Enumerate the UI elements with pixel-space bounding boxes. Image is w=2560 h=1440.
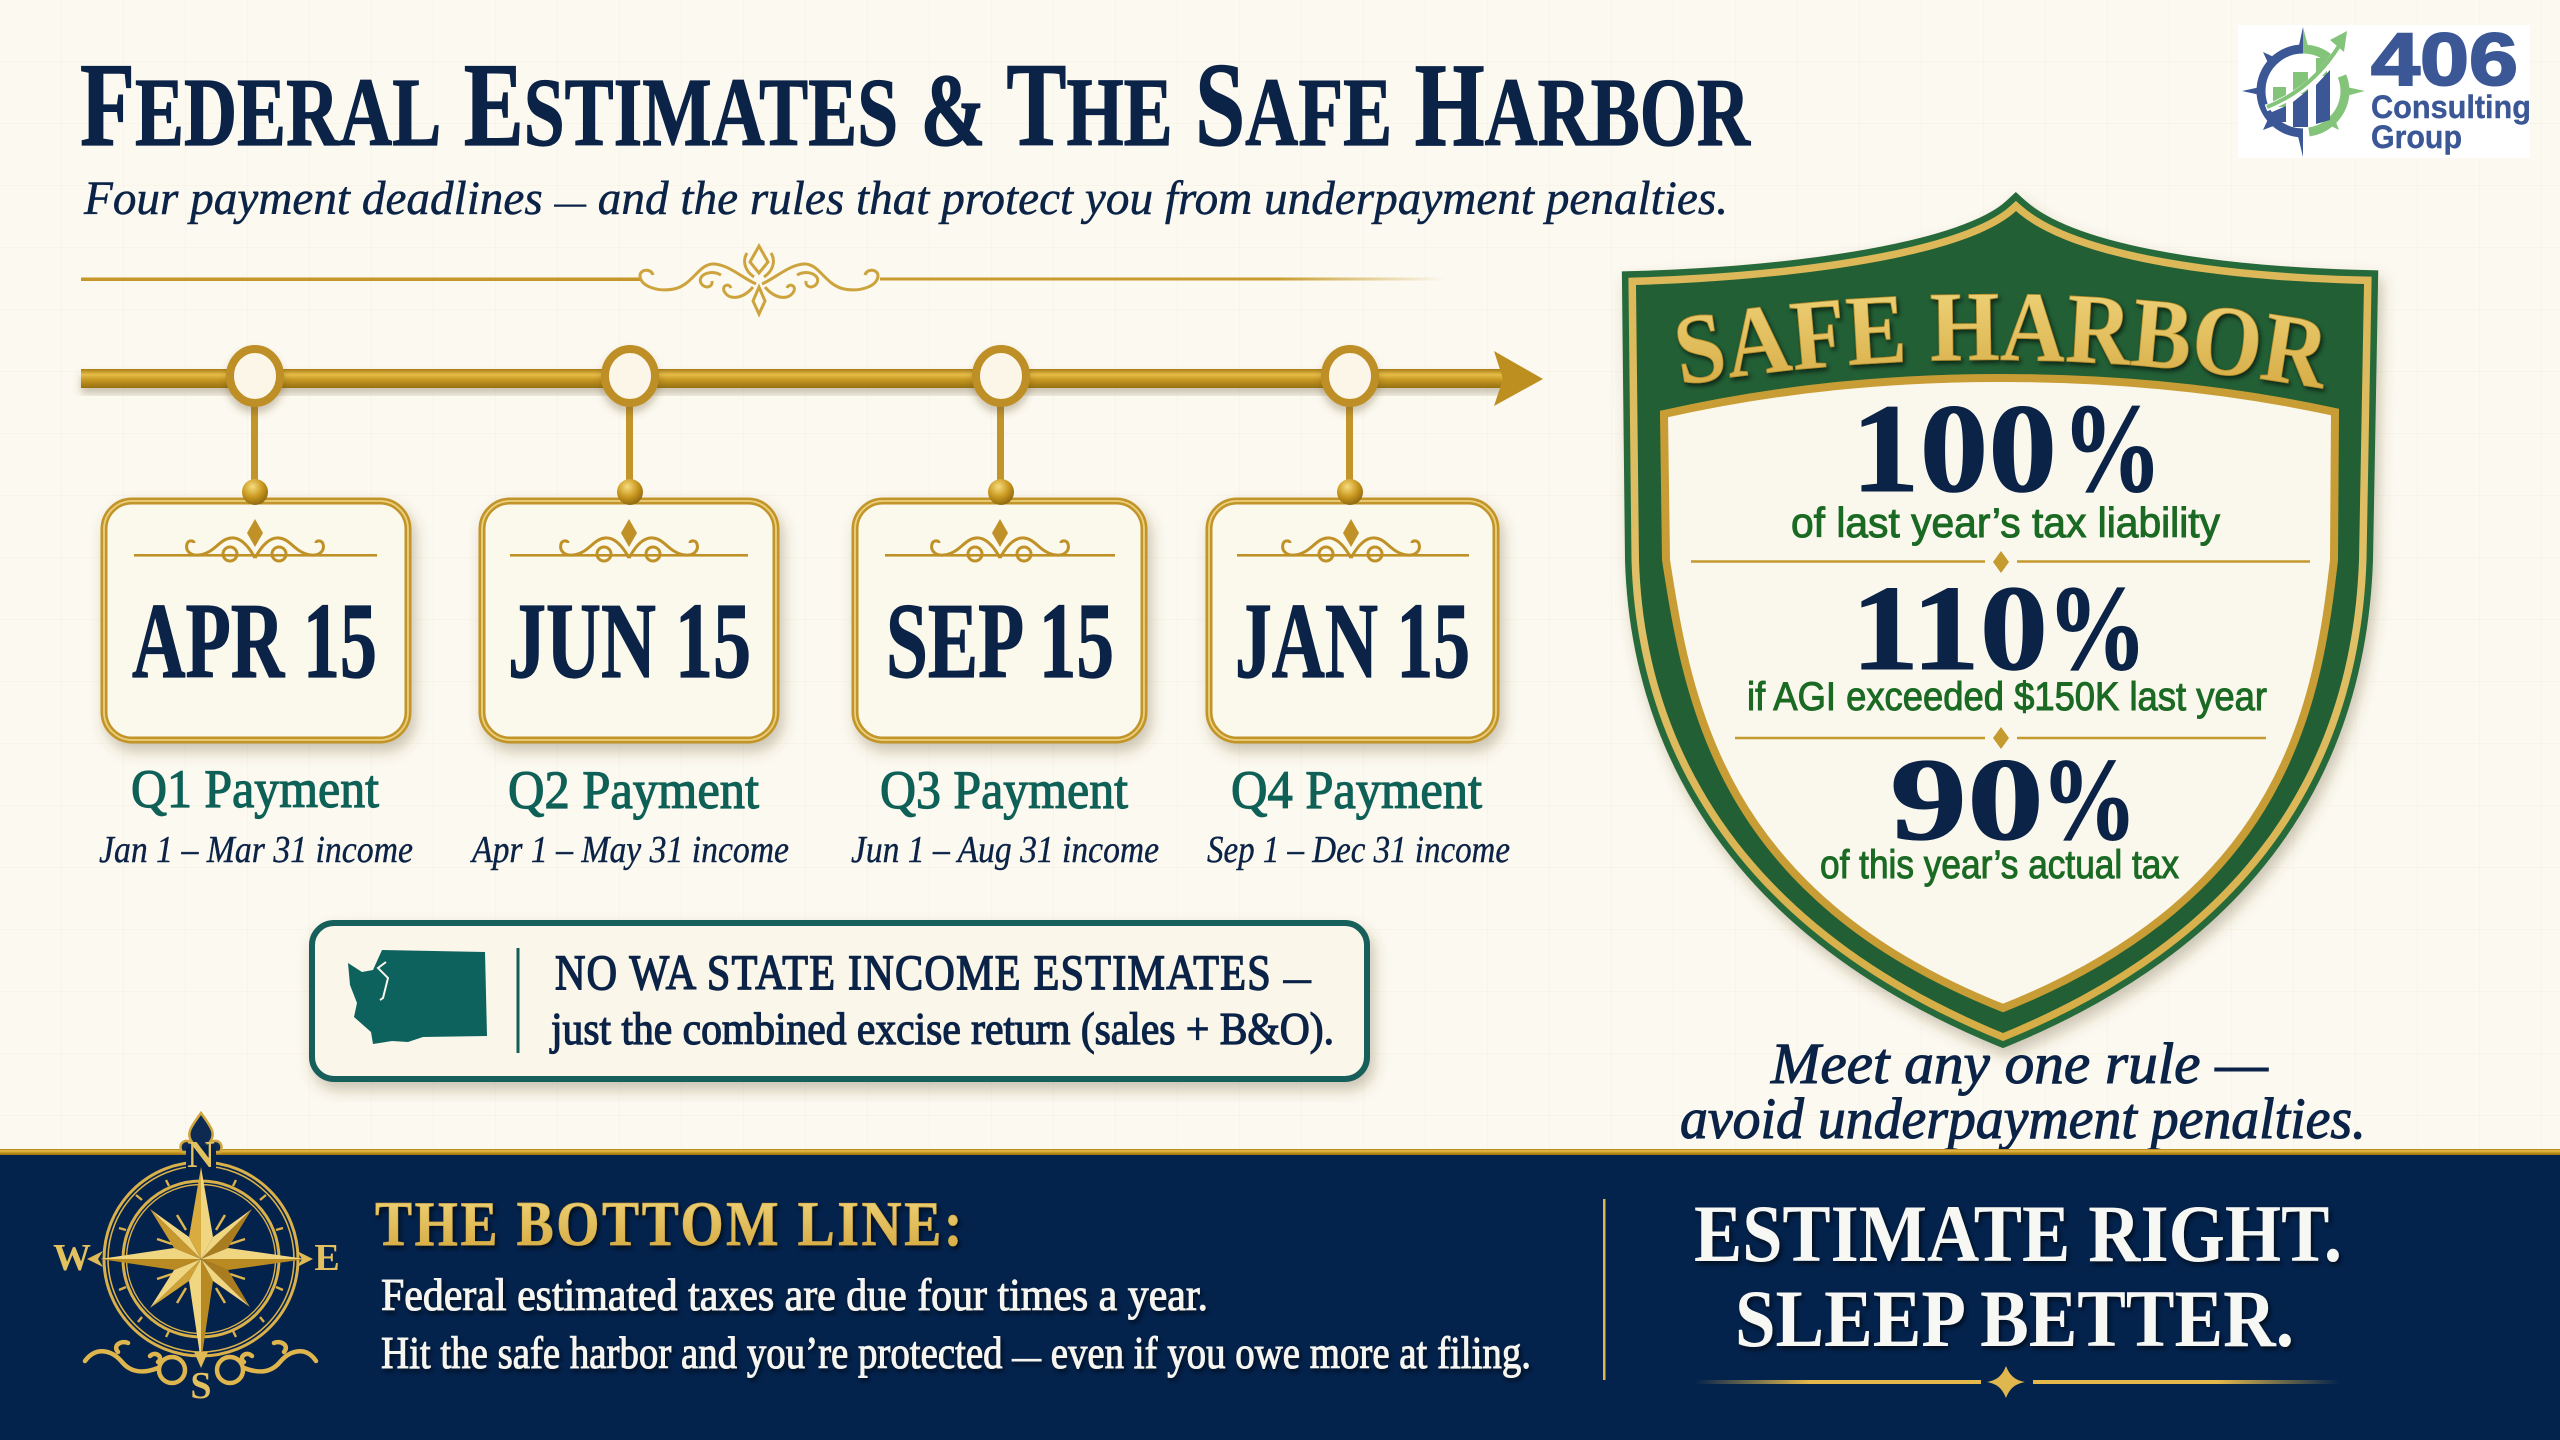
- timeline arrowhead: [1494, 351, 1543, 406]
- shield inner panel: [1664, 378, 2335, 1008]
- timeline: [81, 349, 1543, 482]
- timeline nodes: [230, 349, 1375, 403]
- rule: 100%: %: [2062, 379, 2162, 519]
- quarter labels: Q4 Payment: [1231, 760, 1482, 820]
- income period labels: Sep 1 – Dec 31 income: [1207, 829, 1510, 871]
- slogan: ESTIMATE RIGHT.: [1694, 1188, 2342, 1279]
- shield caption: Meet any one rule —: [1770, 1031, 2268, 1096]
- rule: 90%: [1820, 734, 2179, 887]
- shield title: SAFE HARBOR: [1677, 294, 2327, 394]
- quarter labels: Q1 Payment: [131, 759, 379, 819]
- slogan: [1694, 1188, 2342, 1364]
- income period labels: [99, 829, 1510, 871]
- card: SEP 15: [855, 501, 1144, 740]
- rule: 90%: %: [2041, 734, 2137, 865]
- bottom line text: Federal estimated taxes are due four times a year.: [381, 1269, 1208, 1320]
- slogan: SLEEP BETTER.: [1735, 1273, 2294, 1364]
- quarter labels: Q3 Payment: [880, 760, 1128, 820]
- compass flourish: [85, 1342, 316, 1383]
- shield body: [1636, 211, 2364, 1033]
- shield: safe harbor: [1618, 192, 2390, 1062]
- compass letters: S: [190, 1365, 212, 1407]
- rule: 110%: if AGI exceeded $150K last year: [1747, 675, 2267, 719]
- timeline bar: [81, 369, 1506, 388]
- vertical separator: [1603, 1199, 1606, 1380]
- divider: [1735, 737, 2266, 739]
- footer band: [0, 1149, 2560, 1440]
- logo wordmark: Group: [2371, 119, 2462, 155]
- card: APR 15: APR 15: [132, 582, 377, 701]
- income period labels: Apr 1 – May 31 income: [469, 829, 789, 871]
- quarter labels: Q2 Payment: [508, 760, 759, 820]
- rule: 110%: %: [2047, 561, 2147, 696]
- bottom line heading: THE BOTTOM LINE:: [375, 1188, 965, 1259]
- card: JUN 15: [482, 501, 776, 740]
- card: APR 15: [104, 501, 408, 740]
- compass rings: [104, 1162, 298, 1356]
- subtitle: Four payment deadlines — and the rules that protect you from underpayment penalties.: [83, 172, 1728, 225]
- rule: 100%: of last year’s tax liability: [1791, 499, 2220, 546]
- compass letters: E: [314, 1237, 340, 1279]
- card: SEP 15: SEP 15: [886, 582, 1114, 701]
- rule: 90%: 90: [1890, 734, 2044, 865]
- callout: no WA state income estimates: [312, 923, 1367, 1079]
- logo wordmark: 406: [2371, 18, 2518, 101]
- logo wordmark: [2371, 18, 2531, 155]
- stems: [251, 404, 1353, 482]
- rule: 110%: [1747, 561, 2267, 719]
- rule: 110%: 110: [1851, 561, 2048, 696]
- compass star: [87, 1167, 313, 1368]
- compass letters: N: [187, 1134, 215, 1176]
- compass letters: W: [53, 1237, 91, 1279]
- icon: compass rose: [53, 1113, 340, 1407]
- callout text: NO WA STATE INCOME ESTIMATES —: [555, 944, 1312, 1000]
- slogan underline: [1695, 1366, 2340, 1398]
- ornamental divider: [81, 246, 1445, 314]
- card: JUN 15: JUN 15: [508, 582, 751, 701]
- income period labels: Jan 1 – Mar 31 income: [99, 829, 413, 871]
- shield caption: [1680, 1031, 2366, 1151]
- bottom line text: Hit the safe harbor and you’re protected — even if you owe more at filing.: [381, 1327, 1531, 1378]
- title: FEDERAL ESTIMATES & THE SAFE HARBOR: [80, 38, 1751, 171]
- card: JAN 15: [1209, 501, 1496, 740]
- bottom line text: [381, 1269, 1531, 1378]
- rule: 90%: of this year’s actual tax: [1820, 843, 2179, 887]
- logo: 406 Consulting Group: [2238, 18, 2531, 158]
- rule: 100%: 100: [1851, 379, 2057, 519]
- divider: [1691, 560, 2310, 563]
- rule: 100%: [1791, 379, 2220, 546]
- quarter labels: [131, 759, 1482, 820]
- icon: Washington state: [348, 950, 487, 1044]
- compass fleur: [180, 1113, 222, 1152]
- income period labels: Jun 1 – Aug 31 income: [851, 829, 1159, 871]
- compass letters: [53, 1134, 340, 1407]
- timeline pins: [242, 479, 1363, 505]
- callout: no WA state income estimates: just the combined excise return (sales + B&O).: [549, 1003, 1334, 1054]
- card: JAN 15: JAN 15: [1235, 582, 1470, 701]
- icon: compass with rising chart: [2242, 27, 2365, 157]
- logo wordmark: Consulting: [2371, 89, 2531, 125]
- shield caption: avoid underpayment penalties.: [1680, 1086, 2366, 1151]
